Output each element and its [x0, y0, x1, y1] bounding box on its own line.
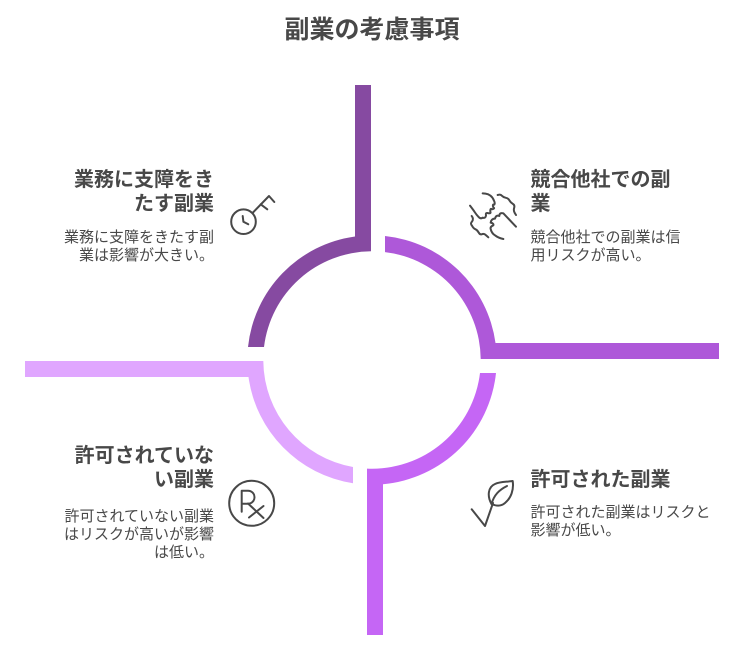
- segment: bottom-right arc and vertical bar: [367, 373, 496, 635]
- icon: clock key: [231, 196, 274, 234]
- segment: top-left arc and vertical bar: [248, 85, 371, 347]
- text: bottom-left description: 許可されていない副業 はリスクが高いが影響 は低い。: [64, 508, 214, 561]
- icon: clasped hands: [470, 193, 516, 239]
- icon: leaf: [472, 481, 513, 526]
- text: top-left description: 業務に支障をきたす副 業は影響が大きい。: [64, 229, 214, 264]
- heading: 業務に支障をきたす副業: 業務に支障をき たす副業: [74, 168, 214, 214]
- text: top-right description: 競合他社での副業は信 用リスクが高い。: [530, 229, 681, 264]
- segment: top-right arc and horizontal bar: [385, 236, 719, 359]
- heading: 競合他社での副業: 競合他社での副 業: [530, 168, 670, 214]
- icon: Rx symbol: [229, 481, 274, 526]
- segment: bottom-left arc and horizontal bar: [25, 361, 353, 483]
- text: bottom-right description: 許可された副業はリスクと 影響が低い。: [530, 504, 711, 539]
- title: 副業の考慮事項: [284, 16, 460, 44]
- heading: 許可された副業: 許可された副業: [530, 469, 670, 491]
- heading: 許可されていない副業: 許可されていな い副業: [75, 445, 214, 491]
